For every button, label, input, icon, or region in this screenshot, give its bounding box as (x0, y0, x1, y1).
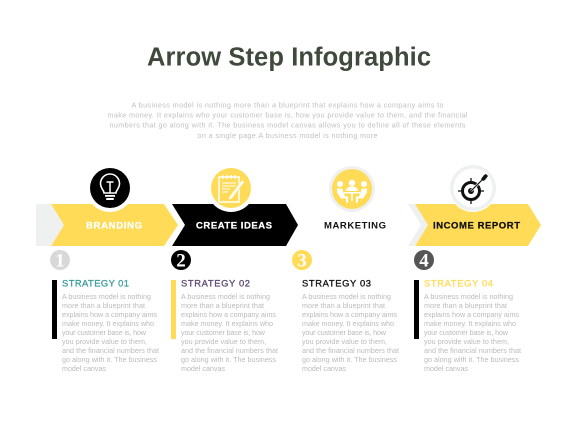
arrow 1: branding (36, 204, 178, 246)
number badge 1 (50, 250, 70, 272)
panel: strategy 01 (52, 278, 159, 373)
panel: strategy 01: you provide value to them, (62, 337, 147, 346)
panel: strategy 04: go along with it. The business (424, 355, 519, 364)
panel: strategy 04: and the financial numbers that (424, 346, 521, 355)
number badge 4 (414, 250, 434, 272)
panel: strategy 03: go along with it. The business (302, 355, 397, 364)
panel: strategy 01: and the financial numbers that (62, 346, 159, 355)
panel: strategy 04: STRATEGY 04 (424, 278, 493, 288)
panel: strategy 02: model canvas (181, 364, 225, 373)
panel: strategy 03 (302, 278, 399, 373)
arrow 4: income report (408, 204, 541, 246)
panel: strategy 03: and the financial numbers that (302, 346, 399, 355)
intro paragraph: on a single page.A business model is nothing more (198, 131, 378, 140)
panel: strategy 01: STRATEGY 01 (62, 278, 129, 288)
panel: strategy 04: more than a blueprint that (424, 301, 507, 310)
intro paragraph: A business model is nothing more than a blueprint that explains how a company aims to (132, 100, 444, 110)
panel: strategy 03: STRATEGY 03 (302, 278, 371, 288)
panel: strategy 02: STRATEGY 02 (181, 278, 250, 288)
panel: strategy 02: your customer base is, how (181, 328, 266, 337)
icon: notepad and pencil (207, 164, 255, 212)
panel: strategy 02 (171, 278, 278, 373)
number badge 4: 4 (419, 250, 429, 272)
panel: strategy 04: your customer base is, how (424, 328, 509, 337)
icon: target with arrow (449, 164, 497, 212)
panel: strategy 02: A business model is nothing (181, 292, 270, 301)
panel: strategy 03: more than a blueprint that (302, 301, 385, 310)
number badge 1: 1 (55, 250, 65, 272)
icon: meeting people (329, 166, 375, 212)
panel: strategy 04: model canvas (424, 364, 468, 373)
panel: strategy 04: A business model is nothing (424, 292, 513, 301)
panel: strategy 01: A business model is nothing (62, 292, 151, 301)
intro paragraph (108, 100, 468, 140)
label 3: marketing: MARKETING (324, 220, 386, 232)
panel: strategy 02: go along with it. The business (181, 355, 276, 364)
panel: strategy 01: go along with it. The business (62, 355, 157, 364)
panel: strategy 03: your customer base is, how (302, 328, 387, 337)
panel: strategy 02: more than a blueprint that (181, 301, 264, 310)
arrow 2: create ideas (172, 204, 298, 246)
panel: strategy 01: more than a blueprint that (62, 301, 145, 310)
panel: strategy 03: A business model is nothing (302, 292, 391, 301)
number badge 3 (292, 250, 312, 272)
icon: light bulb (86, 164, 134, 212)
intro paragraph: make money. It explains who your customer base is, how you provide value to them, and the financial (108, 110, 468, 120)
panel: strategy 02: and the financial numbers that (181, 346, 278, 355)
panel: strategy 01: model canvas (62, 364, 106, 373)
panel: strategy 04: make money. It explains who (424, 319, 516, 328)
panel: strategy 01: your customer base is, how (62, 328, 147, 337)
panel: strategy 03: model canvas (302, 364, 346, 373)
panel: strategy 01: explains how a company aims (62, 310, 157, 319)
arrow 4: income report: INCOME REPORT (433, 220, 520, 232)
panel: strategy 04: you provide value to them, (424, 337, 509, 346)
number badge 2 (171, 250, 191, 272)
panel: strategy 04: explains how a company aims (424, 310, 519, 319)
panel: strategy 03: make money. It explains who (302, 319, 394, 328)
panel: strategy 01: make money. It explains who (62, 319, 154, 328)
panel: strategy 03: you provide value to them, (302, 337, 387, 346)
intro paragraph: numbers that go along with it. The business model canvas allows you to define all of these elements (109, 120, 466, 130)
panel: strategy 02: you provide value to them, (181, 337, 266, 346)
arrow 1: branding: BRANDING (86, 220, 142, 232)
title: Arrow Step Infographic (147, 44, 431, 72)
panel: strategy 04 (414, 278, 521, 373)
arrow 2: create ideas: CREATE IDEAS (196, 220, 272, 232)
panel: strategy 03: explains how a company aims (302, 310, 397, 319)
panel: strategy 02: make money. It explains who (181, 319, 273, 328)
panel: strategy 02: explains how a company aims (181, 310, 276, 319)
number badge 2: 2 (176, 250, 186, 272)
number badge 3: 3 (297, 250, 307, 272)
